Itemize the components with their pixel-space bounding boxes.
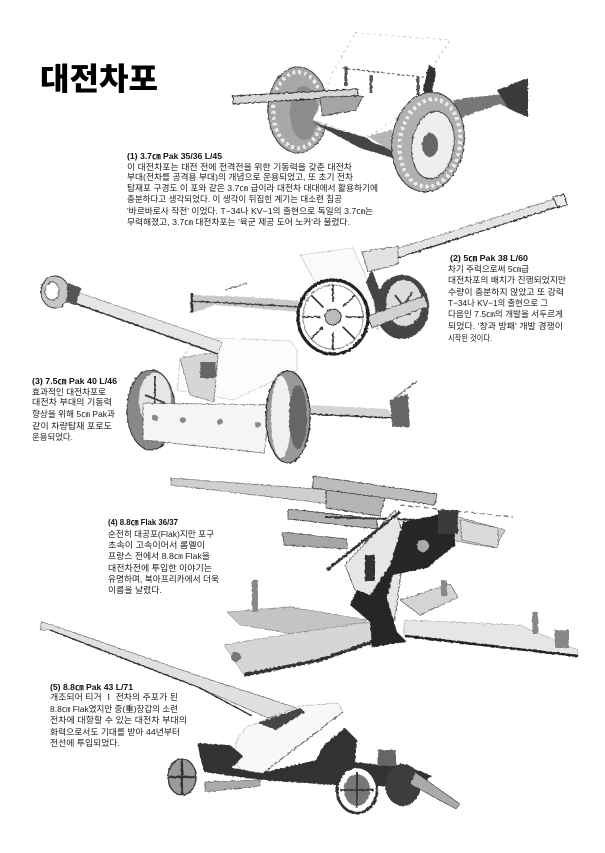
front wheel xyxy=(298,280,368,354)
barrel xyxy=(367,194,567,266)
text block: 7.5cm Pak 40 L/46: 대전차 부대의 기동력 xyxy=(32,396,112,407)
rear wheel xyxy=(385,764,421,806)
text block: 8.8cm Flak 36/37: 프랑스 전에서 8.8㎝ Flak을 xyxy=(108,550,210,561)
illustration: 3.7cm Pak 35/36 xyxy=(233,33,528,197)
shield xyxy=(300,246,398,330)
text block: 7.5cm Pak 40 L/46: 같이 차량탑재 포로도 xyxy=(32,420,112,431)
text block: 8.8cm Flak 36/37: (4) 8.8㎝ Flak 36/37 xyxy=(108,517,178,527)
illustration: 7.5cm Pak 40 xyxy=(41,276,417,463)
trail xyxy=(410,772,460,809)
text block: 5cm Pak 38 L/60: 대전차포의 배치가 진행되었지만 xyxy=(448,274,566,285)
trail xyxy=(190,283,300,314)
text block: 8.8cm Pak 43 L/71: (5) 8.8㎝ Pak 43 L/71 xyxy=(50,682,133,692)
recoil cylinders xyxy=(282,476,437,549)
text block: 8.8cm Flak 36/37: 대전차전에 투입한 이야기는 xyxy=(108,563,212,573)
muzzle brake xyxy=(41,276,81,308)
text block: 5cm Pak 38 L/60: 수량이 충분하지 않았고 또 강력 xyxy=(448,286,564,297)
text block: 3.7cm Pak 35/36 L/45: '바르바로사 작전' 이었다. T−34나 KV−1의 출현으로 독일의 3.7㎝는 xyxy=(127,205,373,216)
barrel xyxy=(171,478,513,548)
dark mass xyxy=(350,515,455,647)
left wheel xyxy=(268,67,328,153)
text block: 8.8cm Pak 43 L/71 xyxy=(50,682,187,748)
text block: 7.5cm Pak 40 L/46: 효과적인 대전차포로 xyxy=(32,386,106,397)
axle xyxy=(312,122,400,158)
barrel xyxy=(233,89,363,116)
text block: 7.5cm Pak 40 L/46: (3) 7.5㎝ Pak 40 L/46 xyxy=(32,376,117,386)
text block: 8.8cm Flak 36/37 xyxy=(108,517,219,595)
text block: 8.8cm Flak 36/37: 이름을 날렸다. xyxy=(108,585,162,595)
barrel xyxy=(40,622,297,718)
title: 대전차포 xyxy=(40,54,158,99)
mount xyxy=(327,510,405,620)
text block: 8.8cm Flak 36/37: 유명하며, 북아프리카에서 더욱 xyxy=(108,574,219,584)
text block: 8.8cm Pak 43 L/71: 전선에 투입되었다. xyxy=(50,737,120,748)
text block: 5cm Pak 38 L/60 xyxy=(448,253,566,343)
text block: 5cm Pak 38 L/60: 되었다. '창과 방패' 개발 경쟁이 xyxy=(448,320,563,331)
text block: 5cm Pak 38 L/60: 차기 주력으로써 5㎝급 xyxy=(448,263,529,274)
shield xyxy=(177,337,297,402)
text block: 5cm Pak 38 L/60: T−34나 KV−1의 출현으로 그 xyxy=(448,298,548,308)
text block: 8.8cm Pak 43 L/71: 화력으로서도 기대를 받아 44년부터 xyxy=(50,726,180,737)
text block: 8.8cm Pak 43 L/71: 8.8㎝ Flak였지만 중(重)장갑의 소련 xyxy=(50,703,178,714)
text block: 3.7cm Pak 35/36 L/45: 무력해졌고, 3.7㎝ 대전차포는 '육군 제공 도어 노커'라 불렸다. xyxy=(127,216,350,227)
text block: 7.5cm Pak 40 L/46: 향상을 위해 5㎝ Pak과 xyxy=(32,408,115,419)
text block: 3.7cm Pak 35/36 L/45: 충분하다고 생각되었다. 이 생각이 뒤집힌 계기는 대소련 침공 xyxy=(127,193,342,204)
text block: 5cm Pak 38 L/60: 시작된 것이다. xyxy=(448,332,492,343)
trail xyxy=(310,381,417,427)
left wheel xyxy=(168,759,196,795)
left wheel xyxy=(127,370,175,450)
text block: 7.5cm Pak 40 L/46 xyxy=(32,376,117,442)
text block: 5cm Pak 38 L/60: 다음인 7.5㎝의 개발을 서두르게 xyxy=(448,309,563,319)
right wheel xyxy=(385,87,471,197)
text block: 3.7cm Pak 35/36 L/45: (1) 3.7㎝ Pak 35/36 L/45 xyxy=(127,151,222,161)
illustration: 8.8cm Flak 36/37 xyxy=(171,476,578,675)
text block: 8.8cm Pak 43 L/71: 개조되어 티거 Ⅰ 전차의 주포가 된 xyxy=(50,691,178,702)
rear wheel xyxy=(375,275,429,339)
text block: 8.8cm Flak 36/37: 초속이 고속이어서 롬멜이 xyxy=(108,539,205,550)
shield xyxy=(232,703,343,775)
text block: 3.7cm Pak 35/36 L/45 xyxy=(127,151,378,227)
right wheel xyxy=(337,767,377,813)
text block: 7.5cm Pak 40 L/46: 운용되었다. xyxy=(32,431,73,442)
breech xyxy=(438,510,498,548)
dark carriage xyxy=(197,728,432,792)
illustration: 5cm Pak 38 xyxy=(190,194,567,354)
text block: 3.7cm Pak 35/36 L/45: 이 대전차포는 대전 전에 전격전을 위한 기동력을 갖춘 대전차 xyxy=(127,161,352,172)
text block: 8.8cm Pak 43 L/71: 전차에 대항할 수 있는 대전차 부대의 xyxy=(50,714,187,725)
text block: 3.7cm Pak 35/36 L/45: 탑재포 구경도 이 포와 같은 3.7㎝ 급이라 대전차 대대에서 활용하기에 xyxy=(127,182,378,193)
shield xyxy=(313,33,450,138)
right wheel xyxy=(266,371,310,463)
trail xyxy=(453,78,528,118)
lower shield xyxy=(143,403,270,453)
axle plate xyxy=(368,296,428,328)
barrel xyxy=(74,293,222,354)
text block: 5cm Pak 38 L/60: (2) 5㎝ Pak 38 L/60 xyxy=(450,253,528,263)
text block: 8.8cm Flak 36/37: 순전히 대공포(Flak)지만 포구 xyxy=(108,529,214,539)
platform xyxy=(224,580,578,675)
illustration: 8.8cm Pak 43 xyxy=(40,622,460,813)
text block: 3.7cm Pak 35/36 L/45: 부대(전차를 공격용 부대)의 개념으로 운용되었고, 또 초기 전차 xyxy=(127,171,353,182)
